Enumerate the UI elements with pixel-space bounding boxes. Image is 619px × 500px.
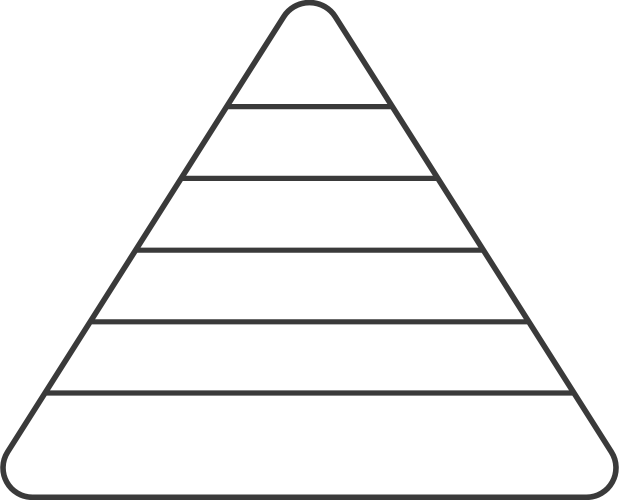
tier divider 4 [90,319,528,324]
tier divider 5 [45,390,574,396]
tier divider 2 [182,176,438,181]
tier divider 1 [227,104,392,109]
tier divider 3 [136,248,483,253]
